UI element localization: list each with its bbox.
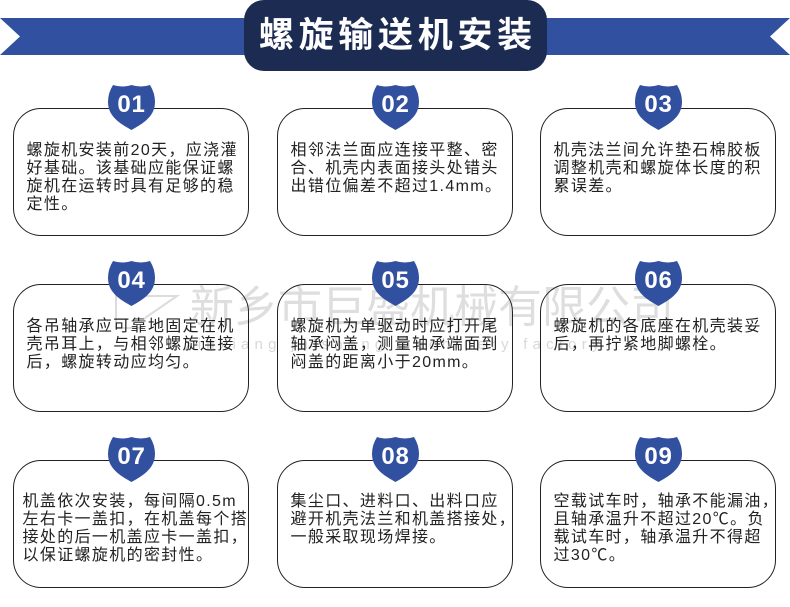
text 02: 合、机壳内表面接头处错头 bbox=[290, 160, 499, 176]
text 02: 相邻法兰面应连接平整、密 bbox=[290, 142, 499, 158]
text 03: 调整机壳和螺旋体长度的积 bbox=[554, 160, 762, 176]
title bbox=[244, 0, 547, 71]
text 08: 避开机壳法兰和机盖搭接处， bbox=[290, 510, 516, 528]
panel: step 03 bbox=[540, 108, 776, 236]
panel: step 02 bbox=[277, 108, 513, 236]
text 05: 轴承闷盖，测量轴承端面到 bbox=[290, 336, 499, 352]
text 02 bbox=[290, 141, 502, 194]
badge 03 bbox=[635, 85, 682, 130]
badge 03: 03 bbox=[644, 90, 673, 118]
badge 02 bbox=[372, 85, 419, 130]
text 04: 各吊轴承应可靠地固定在机 bbox=[26, 318, 235, 334]
panel: step 04 bbox=[13, 284, 249, 412]
text 01: 螺旋机安装前20天，应浇灌 bbox=[26, 142, 238, 158]
badge 01: 01 bbox=[117, 90, 146, 118]
text 04 bbox=[26, 317, 235, 370]
text 01: 定性。 bbox=[26, 196, 79, 212]
text 01: 旋机在运转时具有足够的稳 bbox=[26, 178, 235, 194]
watermark logo bbox=[115, 294, 180, 329]
text 05: 螺旋机为单驱动时应打开尾 bbox=[290, 318, 499, 334]
text 08: 集尘口、进料口、出料口应 bbox=[290, 492, 499, 510]
badge 09 bbox=[635, 437, 682, 482]
badge 06: 06 bbox=[644, 266, 673, 294]
text 04: 壳吊耳上，与相邻螺旋连接 bbox=[26, 336, 235, 352]
badge 09: 09 bbox=[644, 442, 673, 470]
panel: step 08 bbox=[277, 460, 513, 588]
text 09: 载试车时，轴承温升不得超 bbox=[554, 528, 762, 546]
watermark company name: 新乡市巨盛机械有限公司 bbox=[190, 283, 674, 332]
badge 06 bbox=[635, 261, 682, 306]
text 07: 机盖依次安装，每间隔0.5m bbox=[22, 492, 237, 510]
badge 02: 02 bbox=[381, 90, 410, 118]
text 03: 机壳法兰间允许垫石棉胶板 bbox=[554, 142, 762, 158]
panel: step 06 bbox=[540, 284, 776, 412]
badge 04 bbox=[108, 261, 155, 306]
text 09: 过30℃。 bbox=[554, 546, 626, 564]
panel: step 01 bbox=[13, 108, 249, 236]
header ribbon bbox=[0, 18, 790, 55]
text 03 bbox=[554, 141, 762, 194]
badge 05: 05 bbox=[381, 266, 410, 294]
panel: step 09 bbox=[540, 460, 776, 588]
watermark english name: xinxiang julsheng machinery factory bbox=[185, 336, 605, 353]
badge 08: 08 bbox=[381, 442, 410, 470]
badge 07 bbox=[108, 437, 155, 482]
panel: step 07 bbox=[13, 460, 249, 588]
badge 05 bbox=[372, 261, 419, 306]
text 01 bbox=[26, 141, 238, 212]
text 08 bbox=[290, 492, 516, 546]
text 07 bbox=[22, 492, 248, 564]
text 09: 空载试车时，轴承不能漏油， bbox=[554, 492, 779, 510]
title: 螺旋输送机安装 bbox=[259, 16, 537, 55]
badge 08 bbox=[372, 437, 419, 482]
text 08: 一般采取现场焊接。 bbox=[290, 528, 447, 546]
badge 07: 07 bbox=[117, 442, 146, 470]
text 09 bbox=[554, 492, 779, 564]
text 07: 以保证螺旋机的密封性。 bbox=[22, 546, 213, 564]
text 07: 左右卡一盖扣，在机盖每个搭 bbox=[22, 510, 248, 528]
text 01: 好基础。该基础应能保证螺 bbox=[26, 160, 235, 176]
text 03: 累误差。 bbox=[554, 178, 623, 194]
text 05 bbox=[290, 317, 499, 370]
text 02: 出错位偏差不超过1.4mm。 bbox=[290, 178, 502, 194]
text 06: 螺旋机的各底座在机壳装妥 bbox=[554, 318, 762, 334]
badge 01 bbox=[108, 85, 155, 130]
badge 04: 04 bbox=[117, 266, 146, 294]
text 06: 后，再拧紧地脚螺栓。 bbox=[554, 336, 727, 352]
watermark bbox=[115, 283, 674, 353]
text 07: 接处的后一机盖应卡一盖扣， bbox=[22, 528, 248, 546]
text 06 bbox=[554, 317, 762, 352]
text 04: 后，螺旋转动应均匀。 bbox=[26, 354, 200, 370]
panel: step 05 bbox=[277, 284, 513, 412]
text 05: 闷盖的距离小于20mm。 bbox=[290, 354, 479, 370]
text 09: 且轴承温升不超过20℃。负 bbox=[554, 510, 765, 528]
